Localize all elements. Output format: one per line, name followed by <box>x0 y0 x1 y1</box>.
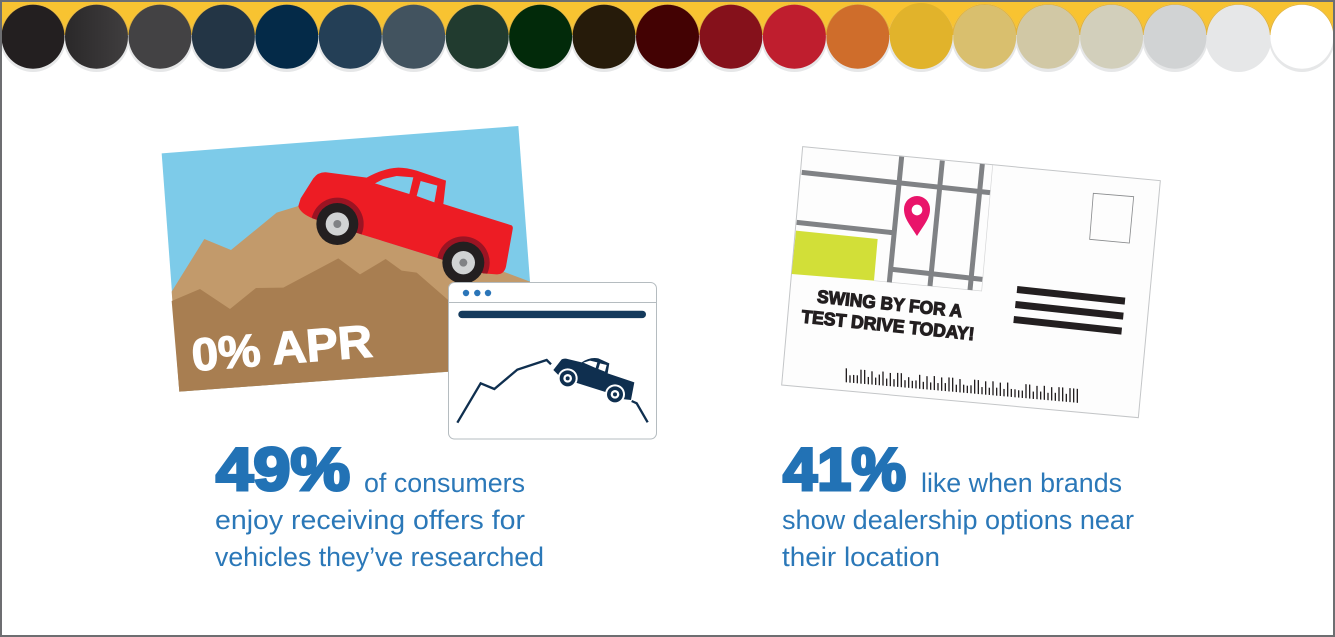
stamp box <box>1090 193 1134 243</box>
icon: small truck on hill <box>457 358 648 423</box>
postcard headline <box>801 286 975 344</box>
window dots <box>463 290 491 296</box>
panel: postcard <box>782 147 1160 418</box>
barcode <box>846 368 1077 403</box>
panel: offer card with truck <box>162 126 530 392</box>
big number: 49% <box>216 436 350 503</box>
description: vehicles they’ve researched <box>215 542 544 572</box>
colour swatch strip <box>0 2 1335 72</box>
description <box>215 468 544 572</box>
icon: map pin <box>904 196 930 236</box>
icon: red pickup truck <box>298 168 513 289</box>
description: of consumers <box>364 468 525 498</box>
address lines <box>1013 286 1125 335</box>
postcard headline: TEST DRIVE TODAY! <box>801 306 975 344</box>
panel: browser window <box>448 282 656 439</box>
description <box>782 468 1134 572</box>
postcard headline: SWING BY FOR A <box>816 286 963 321</box>
description: like when brands <box>921 468 1122 498</box>
map <box>792 157 993 291</box>
stat: 49 percent <box>215 436 544 572</box>
stat: 41 percent <box>782 436 1134 572</box>
dark mountain <box>172 258 483 392</box>
offer text: 0% APR <box>190 315 374 381</box>
description: show dealership options near <box>782 505 1134 535</box>
description: their location <box>782 542 940 572</box>
sky <box>162 126 530 392</box>
address bar <box>458 311 646 318</box>
light mountain <box>172 206 530 392</box>
description: enjoy receiving offers for <box>215 505 525 535</box>
big number: 41% <box>783 436 906 503</box>
